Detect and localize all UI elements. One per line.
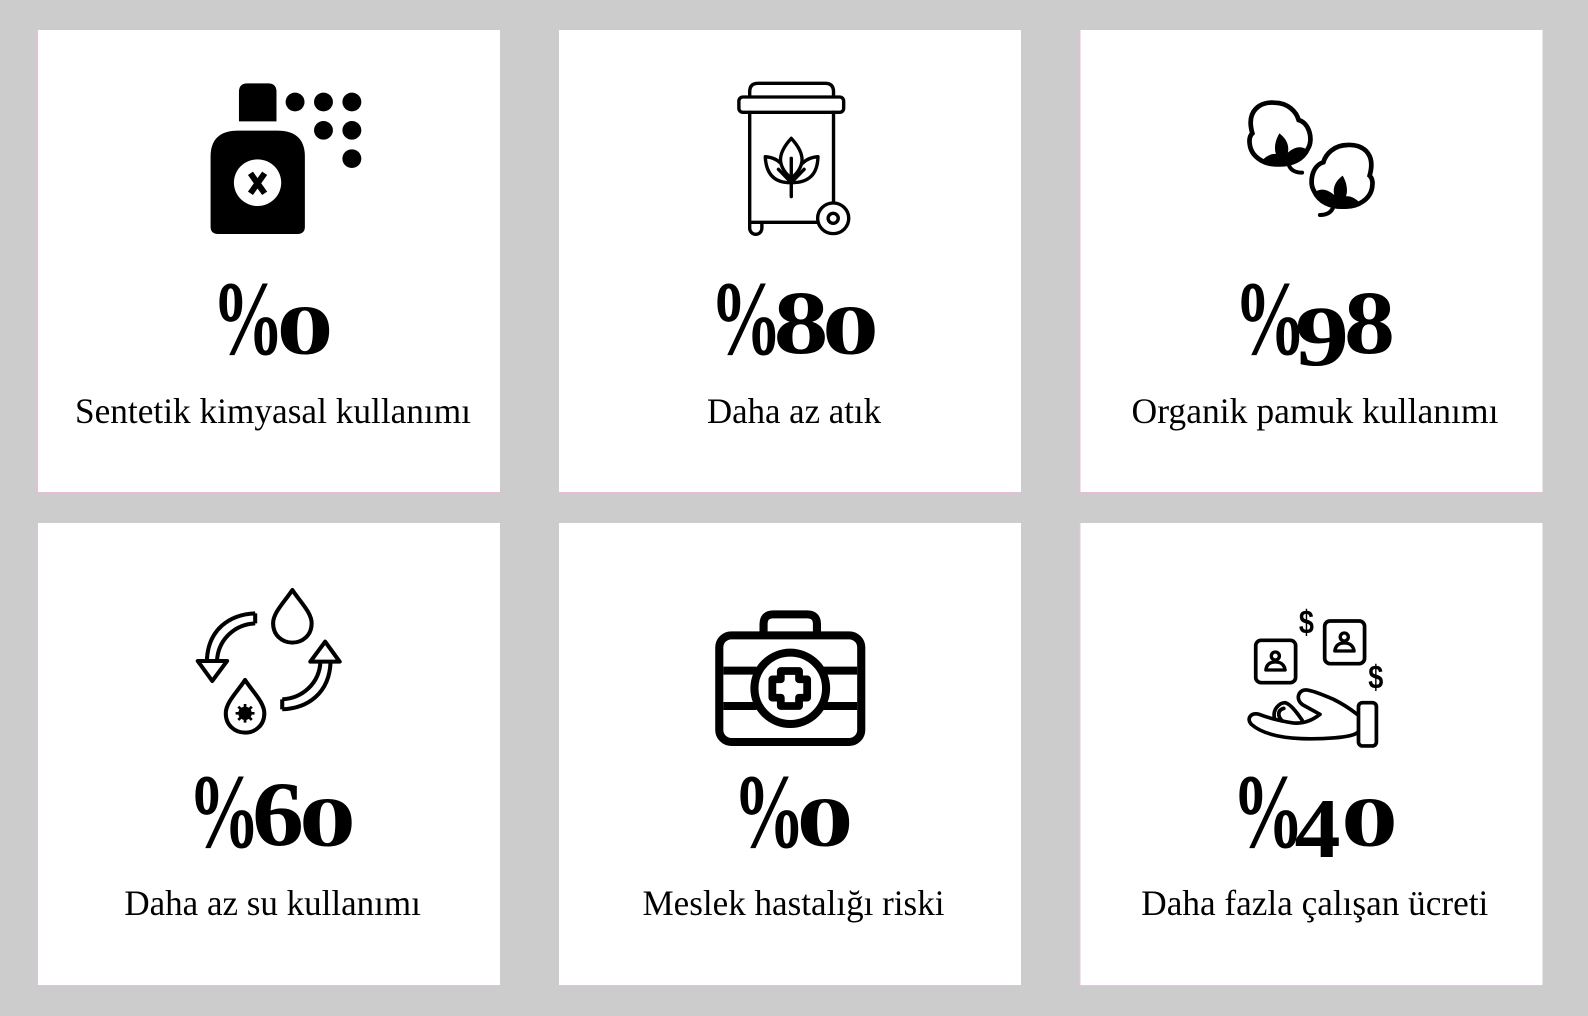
stat: %0: % <box>733 752 805 870</box>
panel: meslek hastalığı <box>559 523 1021 986</box>
icon: hand with portraits and dollars <box>1249 605 1383 746</box>
stat: %98: % <box>1234 259 1306 377</box>
label: Daha fazla çalışan ücreti <box>1141 883 1488 923</box>
icon: spray bottle <box>211 83 361 234</box>
stat: %98 <box>1234 259 1395 384</box>
stat: %0 <box>733 752 853 870</box>
label: Sentetik kimyasal kullanımı <box>75 391 471 431</box>
label: Daha az su kullanımı <box>124 883 421 923</box>
label: Meslek hastalığı riski <box>642 883 944 923</box>
stat: %80 <box>710 259 879 377</box>
stat: %60: 0 <box>299 785 356 862</box>
stat: %0 <box>212 259 333 377</box>
stat: %60: 6 <box>252 764 304 866</box>
stat: %98: 8 <box>1344 273 1395 373</box>
stat: %80: 8 <box>774 272 829 373</box>
stat: %0: % <box>212 259 284 377</box>
icon: recycling bin with plant <box>739 83 849 234</box>
stat: %0: 0 <box>796 785 853 862</box>
stat: %80: % <box>710 259 782 377</box>
icon: water cycle <box>198 590 340 733</box>
stat: %98: 9 <box>1295 289 1349 384</box>
stat: %0: 0 <box>276 293 333 370</box>
label: Daha az atık <box>707 391 881 431</box>
panel: çalışan ücreti <box>1080 523 1542 986</box>
panel: organik pamuk <box>1080 30 1542 494</box>
panel: daha az atık <box>559 30 1021 494</box>
icon: first aid kit <box>719 614 861 742</box>
label: Organik pamuk kullanımı <box>1132 391 1498 431</box>
icon: hand with portraits and dollars: $ <box>1368 660 1383 696</box>
stat: %40: 4 <box>1294 782 1340 876</box>
stat: %40: % <box>1232 752 1304 870</box>
stat: %80: 0 <box>822 293 879 370</box>
stat: %60: % <box>188 752 260 870</box>
panel: su kullanımı <box>37 523 500 986</box>
stat: %40: 0 <box>1341 785 1398 862</box>
stat: %60 <box>188 752 356 870</box>
icon: cotton bolls <box>1249 103 1372 215</box>
panel: sentetik kimyasal <box>37 30 500 494</box>
stat: %40 <box>1232 752 1398 876</box>
icon: hand with portraits and dollars: $ <box>1299 605 1314 641</box>
